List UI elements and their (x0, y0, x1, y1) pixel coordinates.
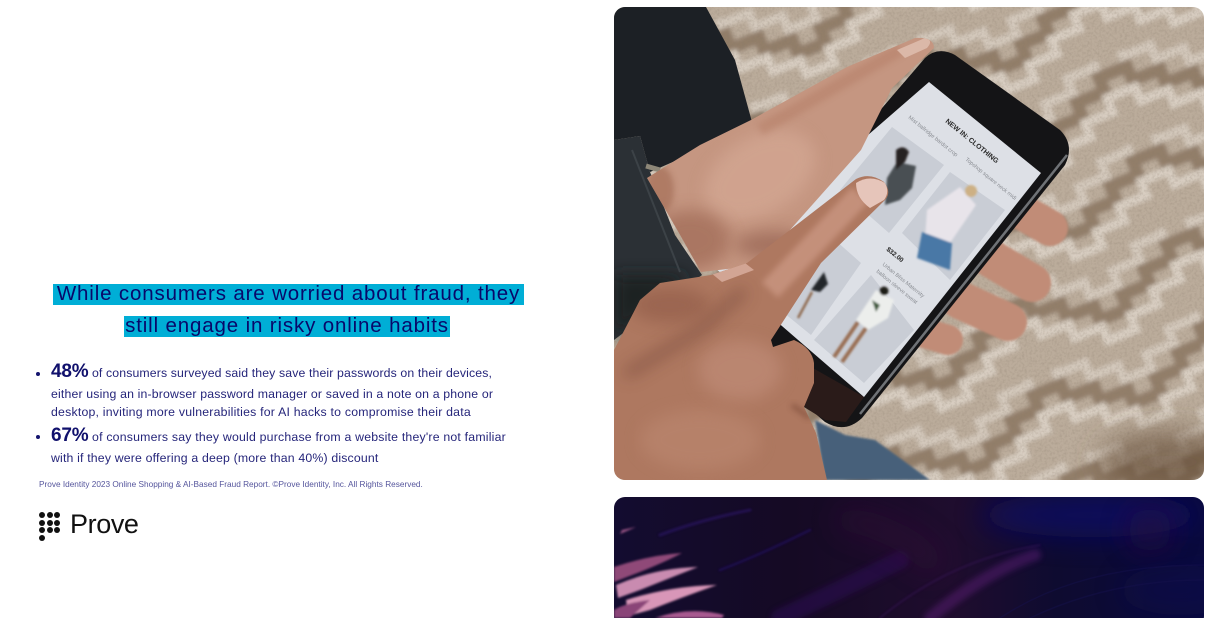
blue haze upper right (980, 493, 1200, 537)
line 2: either using an in-browser password manager or saved in a note on a phone or (51, 387, 493, 401)
model in white suit (834, 286, 894, 362)
logo: Prove (39, 509, 139, 541)
model in black dress (798, 272, 828, 318)
model in patterned dress (885, 147, 916, 205)
bullet (36, 435, 40, 439)
pink glow at lower left (614, 527, 724, 618)
left hand holding phone (647, 38, 934, 272)
phone screen (715, 82, 1041, 397)
model in white sweatshirt and jeans (917, 185, 977, 270)
line 1: 48% of consumers surveyed said they save their passwords on their devices, (51, 361, 492, 382)
line 1: 67% of consumers say they would purchase from a website they're not familiar (51, 425, 506, 446)
product captions (875, 115, 1017, 306)
heading (53, 282, 524, 337)
thumb shading (760, 50, 900, 130)
product captions: Urban Bliss Maternity (881, 262, 925, 300)
statistic: 48% (36, 361, 493, 419)
fingers behind the phone (915, 205, 1050, 340)
photo: hands holding smartphone on a knit blanket (600, 0, 1206, 492)
product captions: Mist ballridge bardot crop (907, 115, 959, 158)
line 2: with if they were offering a deep (more than 40%) discount (51, 451, 378, 465)
palm highlight (708, 133, 812, 217)
bullet (36, 372, 40, 376)
purple streaks (658, 508, 1134, 618)
product captions: Topshop square neck midi (964, 157, 1017, 202)
statistic: 67% (36, 425, 506, 465)
gap shadow between fingers (625, 290, 745, 375)
finger highlight (770, 195, 860, 290)
right hand with pointing finger (610, 170, 900, 485)
dark jacket and denim sleeve (614, 7, 930, 480)
phone body (715, 51, 1069, 427)
wrist shading (650, 210, 730, 270)
product captions: balloon sleeve sweat (875, 269, 919, 306)
heading line 1: While consumers are worried about fraud, they (57, 282, 520, 305)
product tiles (784, 127, 1005, 383)
screen title: NEW IN: CLOTHING (944, 118, 1000, 166)
logo dots (39, 512, 60, 541)
line 3: desktop, inviting more vulnerabilities for AI hacks to compromise their data (51, 405, 471, 419)
source note: Prove Identity 2023 Online Shopping & AI-Based Fraud Report. ©Prove Identity, Inc. All Rights Reserved. (39, 480, 423, 489)
middle finger shading (630, 287, 710, 323)
thumbnail (897, 38, 930, 58)
price: $32.00 (885, 246, 905, 264)
index fingernail (856, 178, 887, 208)
logo wordmark: Prove (70, 509, 139, 539)
heading line 2: still engage in risky online habits (125, 314, 449, 337)
knuckle highlights (698, 340, 782, 400)
photographs (614, 7, 1204, 618)
photo: abstract purple light streaks (614, 493, 1206, 618)
middle fingernail (711, 263, 754, 282)
knit blanket (600, 0, 1206, 492)
